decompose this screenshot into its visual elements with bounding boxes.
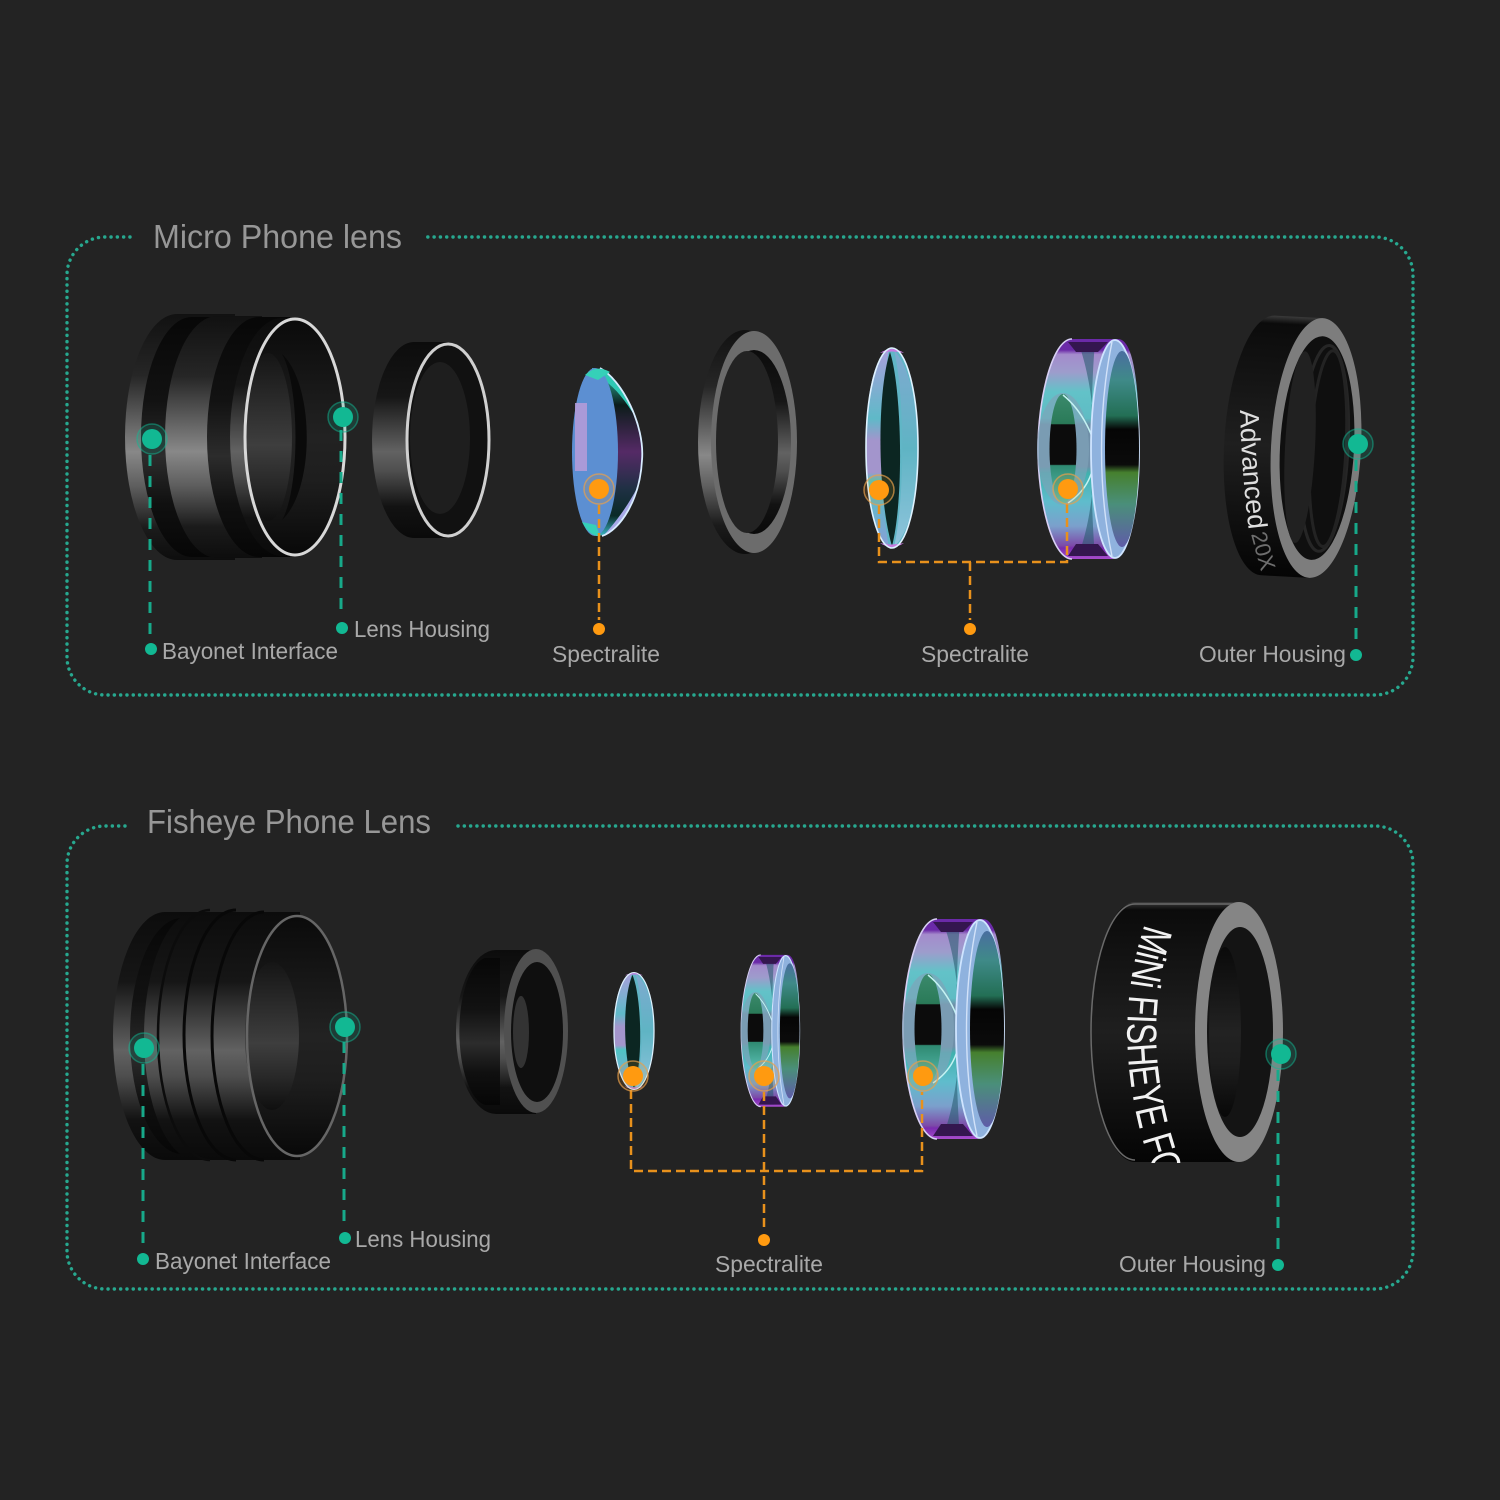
callout: spectralite pair: Spectralite	[921, 641, 1029, 667]
panel: fisheye phone lens	[65, 803, 1415, 1291]
callout: spectralite trio: Spectralite	[715, 1251, 823, 1277]
panel border: fisheye	[67, 826, 1413, 1289]
engraved text: 20X: 20X	[1246, 529, 1281, 573]
part: spectralite thick lens	[1037, 339, 1139, 559]
panel: micro phone lens	[65, 218, 1415, 697]
part: fisheye lens housing	[456, 949, 568, 1114]
engraved text: Advanced: Advanced	[1240, 410, 1268, 528]
panel border: micro	[67, 237, 1413, 695]
part: micro lens housing	[372, 342, 489, 538]
callout: spectralite single	[552, 474, 660, 667]
heading: Micro Phone lens: Micro Phone lens	[153, 218, 402, 255]
callout: lens housing: Lens Housing	[354, 616, 490, 642]
callout: bayonet interface	[137, 424, 338, 664]
callout: bayonet interface	[129, 1033, 331, 1274]
callout: lens housing: Lens Housing	[355, 1226, 491, 1252]
callout: lens housing	[330, 1012, 491, 1252]
callout: lens housing	[328, 402, 490, 642]
callout: spectralite single: Spectralite	[552, 641, 660, 667]
part: spectralite plano-convex lens	[572, 368, 642, 536]
part: spectralite thin lens	[866, 348, 918, 548]
part: spacer ring	[698, 330, 797, 554]
callout: outer housing	[1199, 429, 1373, 667]
callout: spectralite trio	[618, 1061, 938, 1277]
part: micro bayonet tube	[125, 314, 346, 560]
engraved text: MiNi FISHEYE FO: MiNi FISHEYE FO	[1126, 926, 1180, 1163]
callout: spectralite pair	[864, 474, 1083, 667]
heading: Fisheye Phone Lens: Fisheye Phone Lens	[147, 803, 431, 840]
callout: outer housing: Outer Housing	[1119, 1251, 1266, 1277]
callout: bayonet interface: Bayonet Interface	[155, 1248, 331, 1274]
part: spectralite small lens	[614, 972, 654, 1089]
part: spectralite medium lens	[740, 955, 800, 1107]
part: micro outer housing	[1224, 316, 1362, 578]
callout: outer housing: Outer Housing	[1199, 641, 1346, 667]
callout: bayonet interface: Bayonet Interface	[162, 638, 338, 664]
callout: outer housing	[1119, 1039, 1296, 1277]
part: spectralite large lens	[902, 919, 1004, 1139]
part: fisheye outer housing	[1090, 902, 1283, 1163]
part: fisheye bayonet tube	[113, 910, 348, 1160]
